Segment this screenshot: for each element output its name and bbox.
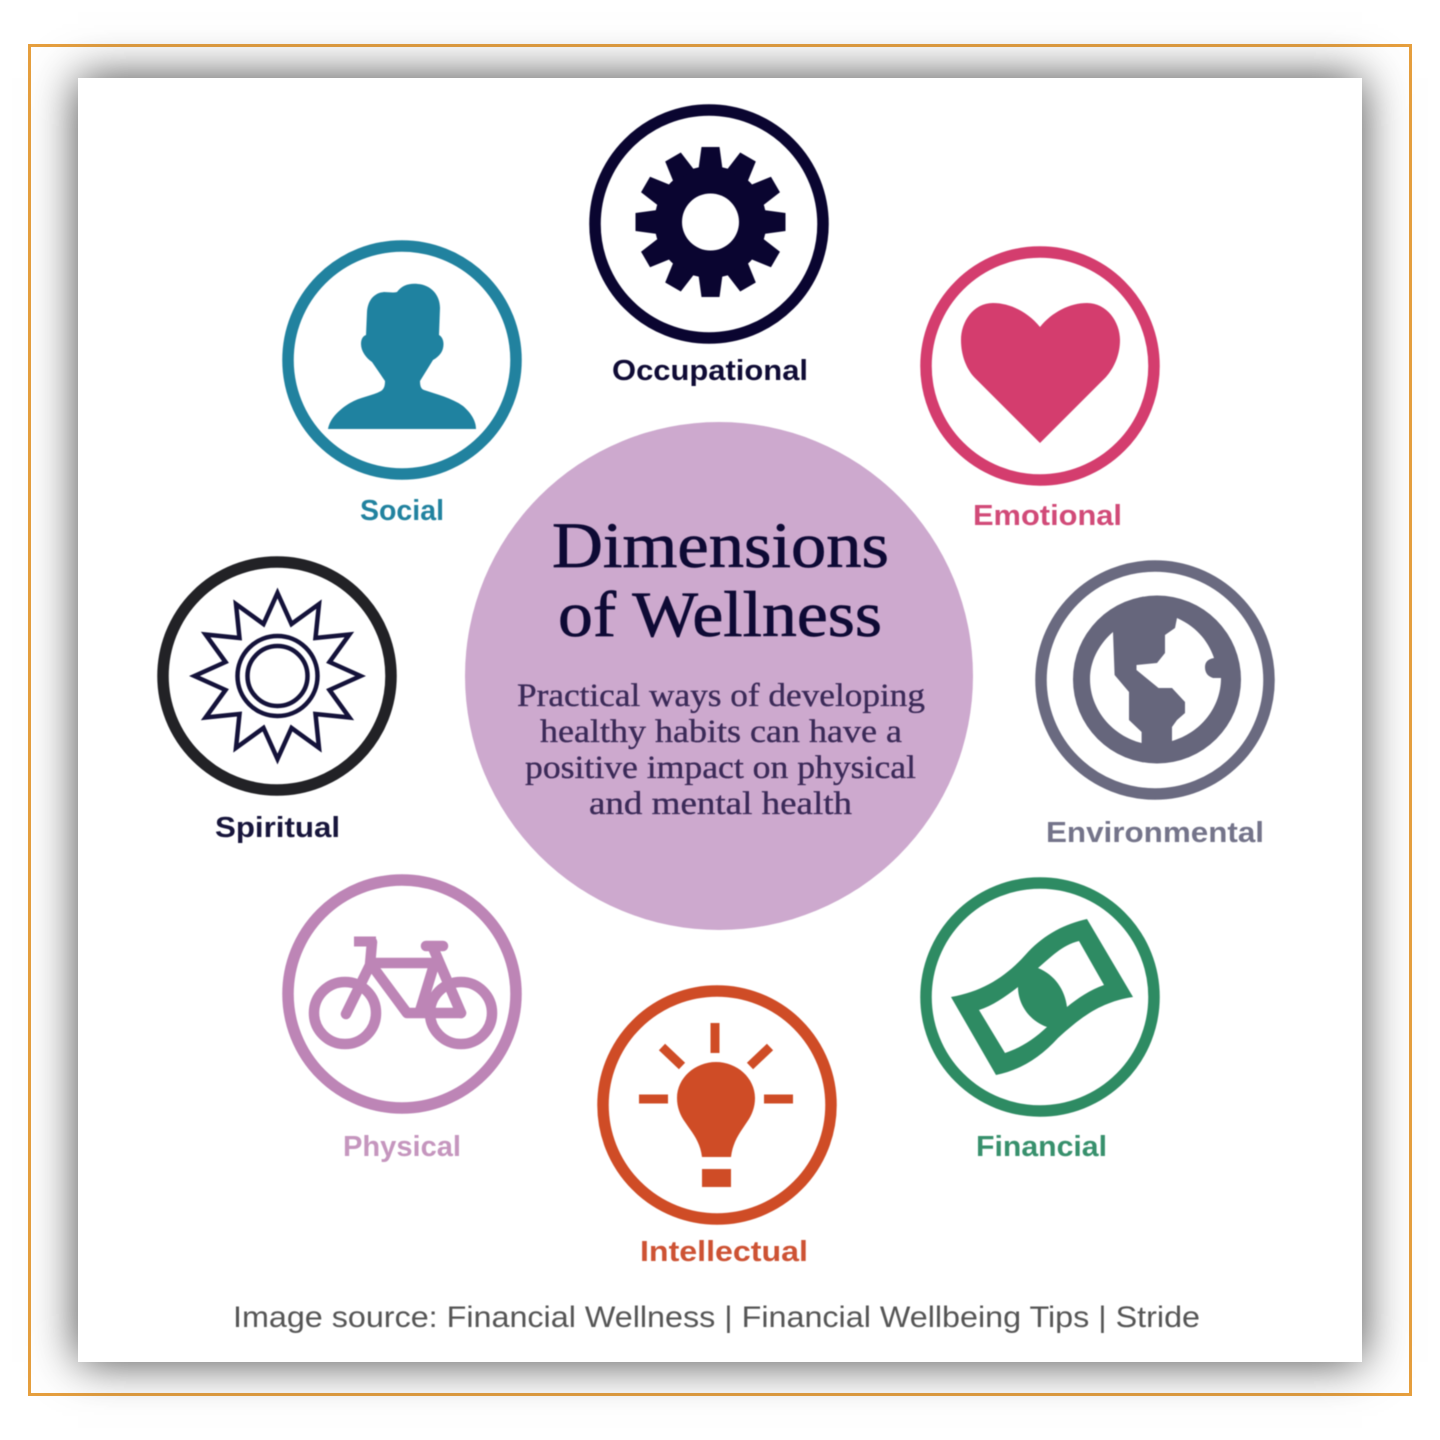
dimension: Environmental: [1041, 566, 1269, 849]
dimension: Financial: [926, 883, 1154, 1163]
icon: gear: [636, 147, 786, 297]
label: Physical: [343, 1131, 461, 1163]
icon: heart: [961, 303, 1120, 443]
dimension: Spiritual: [163, 562, 391, 844]
label: Emotional: [973, 500, 1122, 532]
dimension: Emotional: [926, 252, 1154, 532]
dimension: Social: [288, 246, 516, 527]
white card with shadow: [78, 78, 1362, 1362]
icon: banknote: [951, 919, 1133, 1075]
icon: globe: [1073, 596, 1241, 764]
description text: healthy habits can have a: [540, 714, 902, 750]
title: of Wellness: [558, 579, 882, 651]
icon: light bulb: [639, 1023, 793, 1187]
dimension: Physical: [288, 880, 516, 1163]
icon: sun: [194, 593, 360, 759]
label: Intellectual: [640, 1236, 808, 1268]
label: Occupational: [612, 355, 808, 387]
description text: and mental health: [589, 786, 853, 822]
title: [552, 510, 889, 651]
image source caption: Image source: Financial Wellness | Financial Wellbeing Tips | Stride: [233, 1301, 1200, 1334]
label: Social: [360, 495, 444, 527]
dimension: Occupational: [595, 110, 823, 387]
title: Dimensions: [552, 510, 889, 582]
description text: Practical ways of developing: [517, 678, 925, 714]
description text: [517, 678, 925, 822]
description text: positive impact on physical: [525, 750, 916, 786]
central circle: Dimensions of Wellness: [465, 422, 973, 930]
label: Financial: [976, 1131, 1107, 1163]
icon: bicycle: [314, 942, 492, 1044]
label: Environmental: [1046, 817, 1264, 849]
icon: person: [328, 284, 476, 429]
label: Spiritual: [215, 812, 340, 844]
dimension: Intellectual: [603, 991, 831, 1268]
